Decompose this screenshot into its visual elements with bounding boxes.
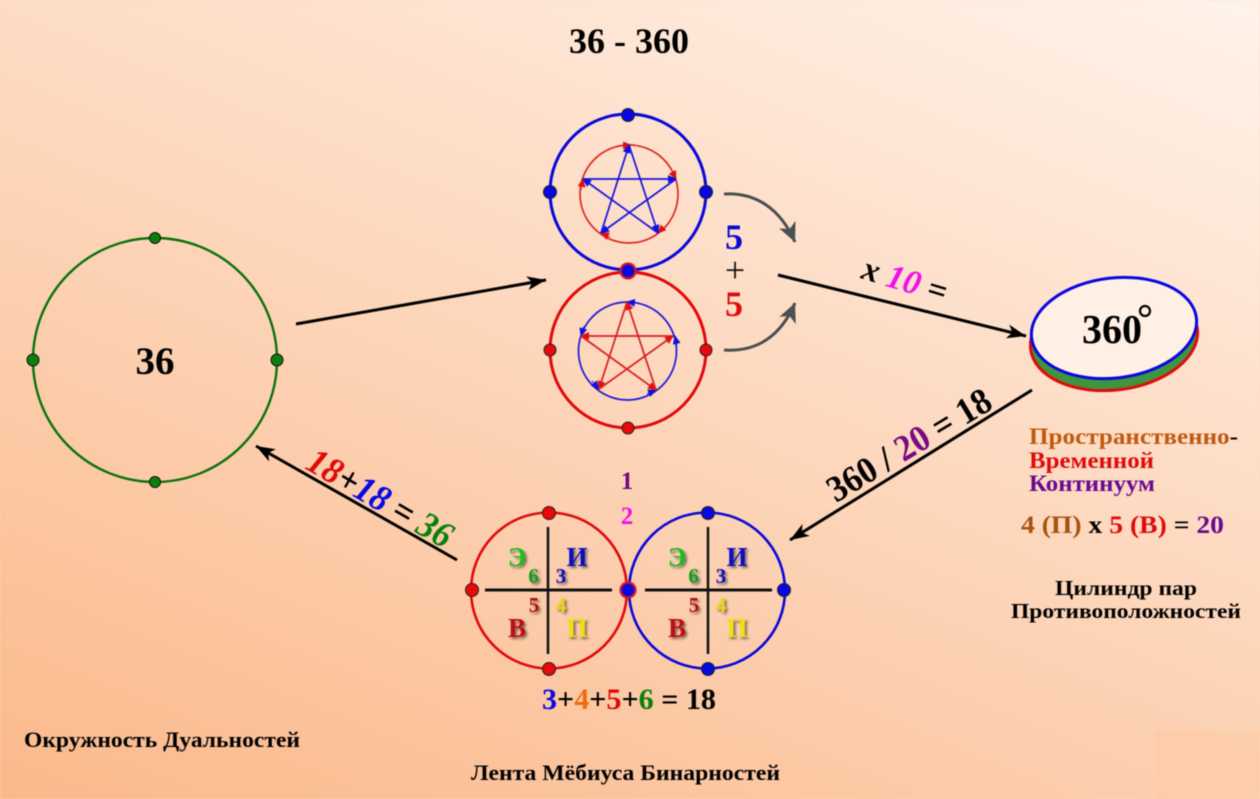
arrow: to cylinder xyxy=(778,275,1026,336)
blue quadrant circle: 6 xyxy=(688,564,699,588)
label: 18+18 = 36: 18+18 = 36 xyxy=(300,440,461,557)
label: cylinder of pairs: Цилиндр пар xyxy=(1055,576,1197,600)
continuum text: Континуум xyxy=(1029,471,1155,496)
label: 5 + 5: 5 xyxy=(725,217,743,257)
continuum text xyxy=(1029,424,1238,496)
label: cylinder of pairs xyxy=(1011,576,1241,623)
red quadrant circle: 4 xyxy=(556,593,567,617)
blue quadrant circle: В xyxy=(668,613,686,643)
red quadrant circle: П xyxy=(566,613,588,643)
blue quadrant circle: 4 xyxy=(716,593,727,617)
circle of dualities xyxy=(27,232,283,488)
label: 360 / 20 = 18: 360 / 20 = 18 xyxy=(820,380,999,511)
arrow: back to 36 xyxy=(256,446,457,560)
blue quadrant circle: 3 xyxy=(716,564,726,588)
label: x 10 =: x 10 = xyxy=(857,250,952,311)
cylinder: 360 xyxy=(1082,306,1142,352)
label: circle of dualities: Окружность Дуальностей xyxy=(24,727,300,752)
label: 5 + 5 xyxy=(725,217,745,324)
blue circle with pentagram xyxy=(544,108,712,270)
labels 1 and 2: 2 xyxy=(621,503,633,530)
cylinder xyxy=(1024,268,1204,400)
continuum text: Пространственно - xyxy=(1029,424,1238,449)
curved arrow: bottom xyxy=(724,303,795,350)
arrow: from cylinder xyxy=(790,390,1032,540)
continuum text: Временной xyxy=(1029,448,1154,473)
circle of dualities: 36 xyxy=(136,340,174,383)
red quadrant circle: 6 xyxy=(528,564,539,588)
formula: 4 x 5 = 20: 4 (П) x 5 (В) = 20 xyxy=(1021,512,1224,539)
label: Moebius strip of binaries: Лента Мёбиуса Бинарностей xyxy=(471,760,780,785)
curved arrow: top xyxy=(724,194,795,242)
labels 1 and 2 xyxy=(621,468,633,530)
blue quadrant circle: П xyxy=(726,613,748,643)
title: 36 - 360 xyxy=(569,21,689,61)
red quadrant circle: В xyxy=(508,613,526,643)
label: 5 + 5: + xyxy=(725,250,745,290)
blue quadrant circle: Э xyxy=(668,542,686,572)
label: cylinder of pairs: Противоположностей xyxy=(1011,599,1241,623)
blue quadrant circle: 5 xyxy=(689,593,699,617)
red quadrant circle xyxy=(466,506,627,676)
blue quadrant circle xyxy=(629,506,790,676)
shared node xyxy=(620,264,636,278)
red quadrant circle: Э xyxy=(508,542,526,572)
shared node: lower xyxy=(620,582,636,598)
arrow: circle to pentagrams xyxy=(296,280,546,324)
label: 5 + 5: 5 xyxy=(725,284,743,324)
red quadrant circle: И xyxy=(566,542,588,572)
blue quadrant circle: И xyxy=(726,542,748,572)
red circle with pentagram xyxy=(544,272,712,434)
red quadrant circle: 3 xyxy=(556,564,566,588)
formula: 3+4+5+6 = 18: 3+4+5+6 = 18 xyxy=(542,683,716,716)
red quadrant circle: 5 xyxy=(529,593,539,617)
labels 1 and 2: 1 xyxy=(621,468,633,495)
